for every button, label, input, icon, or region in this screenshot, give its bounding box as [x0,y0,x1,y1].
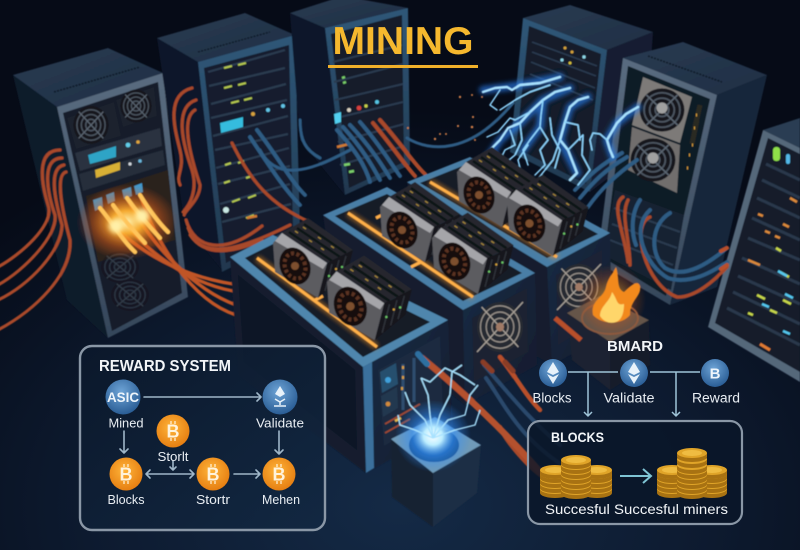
node: asic: ASIC [107,390,139,405]
gpu chassis: back unit [407,147,612,365]
labels: reward nodes: Mined [108,416,144,430]
caption: successful miners: Succesful Succesful miners [545,501,728,517]
labels: reward nodes: Storlt [158,450,189,464]
gpu chassis: front unit [230,218,452,473]
arrow: coins transfer [620,469,651,483]
node: bitcoin blocks [110,458,142,490]
node: blocks ethereum [539,359,567,387]
rack: second server [157,13,300,272]
node: bitcoin mehen: B [272,464,286,484]
node: asic [106,380,140,414]
coins: left stacks [540,455,612,499]
node: bitcoin mehen [262,458,296,490]
node: bitcoin stortr: B [206,464,220,484]
node: reward bitcoin: B [710,366,721,382]
labels: board nodes: Reward [692,390,740,406]
rack: right server with large fans [597,42,767,305]
rack: far left server [13,48,188,338]
heading: blocks: BLOCKS [551,429,604,445]
blue energy block: glowing connector [391,365,481,527]
cables: orange and blue wiring [0,88,727,330]
arrows: reward flow [120,393,283,478]
labels: reward nodes [108,416,304,507]
title: MINING [332,20,474,63]
gpu chassis: middle unit [323,182,537,405]
labels: board nodes [532,390,740,406]
node: bitcoin stortr [196,458,230,490]
rack: far right server [708,118,800,382]
labels: reward nodes: Blocks [108,493,144,507]
labels: board nodes: Blocks [532,390,572,406]
coins: right stacks [657,448,727,499]
sparks: glowing cable fire on left rack [77,184,177,260]
flow: board heading and nodes [532,339,740,416]
node: bitcoin top [156,414,190,448]
node: bitcoin blocks: B [120,464,132,484]
labels: reward nodes: Mehen [262,493,300,507]
heading: reward system: REWARD SYSTEM [99,358,231,375]
node: validate [262,380,298,414]
rack: right back server [510,5,653,192]
flame block: burning connector [555,264,650,390]
connectors: board flow lines [568,372,700,416]
labels: reward nodes: Stortr [196,493,230,507]
node: bitcoin top: B [166,422,180,442]
node: validate ethereum [620,359,648,387]
lightning: upper right electric arcs [483,77,638,185]
orange sparks: floating dots [407,94,483,141]
rack: centre back server [290,0,410,195]
labels: reward nodes: Validate [256,416,304,430]
cables: foreground connections [418,354,570,490]
node: reward bitcoin [701,359,729,387]
labels: board nodes: Validate [604,390,654,406]
panel: reward system [80,346,325,530]
panel: blocks [528,421,742,524]
flow: board heading and nodes: BMARD [607,339,663,355]
